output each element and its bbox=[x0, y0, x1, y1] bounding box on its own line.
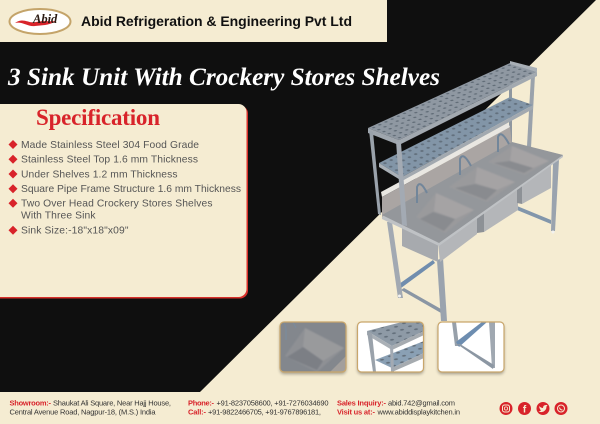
spec list: Two Over Head Crockery Stores Shelves bbox=[21, 199, 212, 210]
spec list: Square Pipe Frame Structure 1.6 mm Thickness bbox=[21, 184, 241, 195]
header band bbox=[0, 0, 387, 42]
footer: sales and website: Sales Inquiry:- bbox=[337, 398, 386, 408]
social icons bbox=[500, 402, 568, 416]
legs bbox=[387, 222, 403, 298]
footer: showroom: Central Avenue Road, Nagpur-18, (M.S.) India bbox=[10, 408, 156, 416]
white strip under shelf bbox=[381, 123, 510, 197]
sink 2 basin bbox=[449, 167, 515, 202]
company name: Abid Refrigeration & Engineering Pvt Ltd bbox=[81, 13, 352, 29]
back uprights bbox=[509, 65, 512, 142]
thumbnail: legs detail bbox=[438, 322, 504, 374]
backsplash bbox=[382, 127, 512, 217]
panel: specification bbox=[0, 104, 248, 298]
front uprights bbox=[369, 130, 381, 215]
sink 3 basin bbox=[488, 146, 549, 175]
heading: Specification bbox=[36, 105, 160, 130]
footer: sales and website: Visit us at:- bbox=[337, 408, 376, 416]
spec list: Under Shelves 1.2 mm Thickness bbox=[21, 169, 178, 180]
footer: sales and website: abid.742@gmail.com bbox=[388, 398, 455, 408]
footer: showroom: Shaukat Ali Square, Near Hajj House, bbox=[53, 398, 171, 408]
spec list: Sink Size:-18"x18"x09" bbox=[21, 226, 129, 237]
footer: phone: Call:- bbox=[188, 408, 206, 416]
spec list: Stainless Steel Top 1.6 mm Thickness bbox=[21, 155, 198, 166]
thumbnail: shelves detail bbox=[358, 322, 424, 374]
footer: phone: +91-9822466705, +91-9767896181, bbox=[208, 408, 321, 416]
logo: Abid bbox=[32, 12, 58, 26]
sink bodies bbox=[402, 225, 438, 262]
footer: phone: Phone:- bbox=[188, 398, 214, 408]
icon: whatsapp bbox=[554, 402, 568, 415]
lower shelf bbox=[379, 97, 533, 181]
icon: instagram bbox=[500, 402, 512, 415]
footer: phone bbox=[188, 398, 328, 416]
logo bbox=[10, 9, 70, 34]
product: three sink unit with shelves bbox=[368, 61, 563, 321]
title: 3 Sink Unit With Crockery Stores Shelves bbox=[7, 64, 440, 91]
sink 1 basin bbox=[416, 193, 474, 233]
icon: twitter bbox=[536, 402, 550, 415]
footer: phone: +91-8237058600, +91-7276034690 bbox=[216, 398, 328, 408]
faucets bbox=[417, 134, 509, 203]
thumbnail: sink detail bbox=[280, 322, 346, 374]
footer: sales and website bbox=[337, 398, 460, 416]
upper shelf bbox=[368, 61, 537, 145]
lower frame bars bbox=[399, 260, 435, 288]
footer: showroom: Showroom:- bbox=[10, 398, 52, 408]
spec list: Made Stainless Steel 304 Food Grade bbox=[21, 140, 199, 151]
icon: facebook: f bbox=[523, 404, 527, 416]
countertop bbox=[382, 143, 563, 246]
footer: sales and website: www.abiddisplaykitchen.in bbox=[376, 408, 460, 416]
spec list bbox=[8, 140, 241, 237]
footer: showroom bbox=[10, 398, 171, 416]
spec list: With Three Sink bbox=[21, 211, 96, 222]
